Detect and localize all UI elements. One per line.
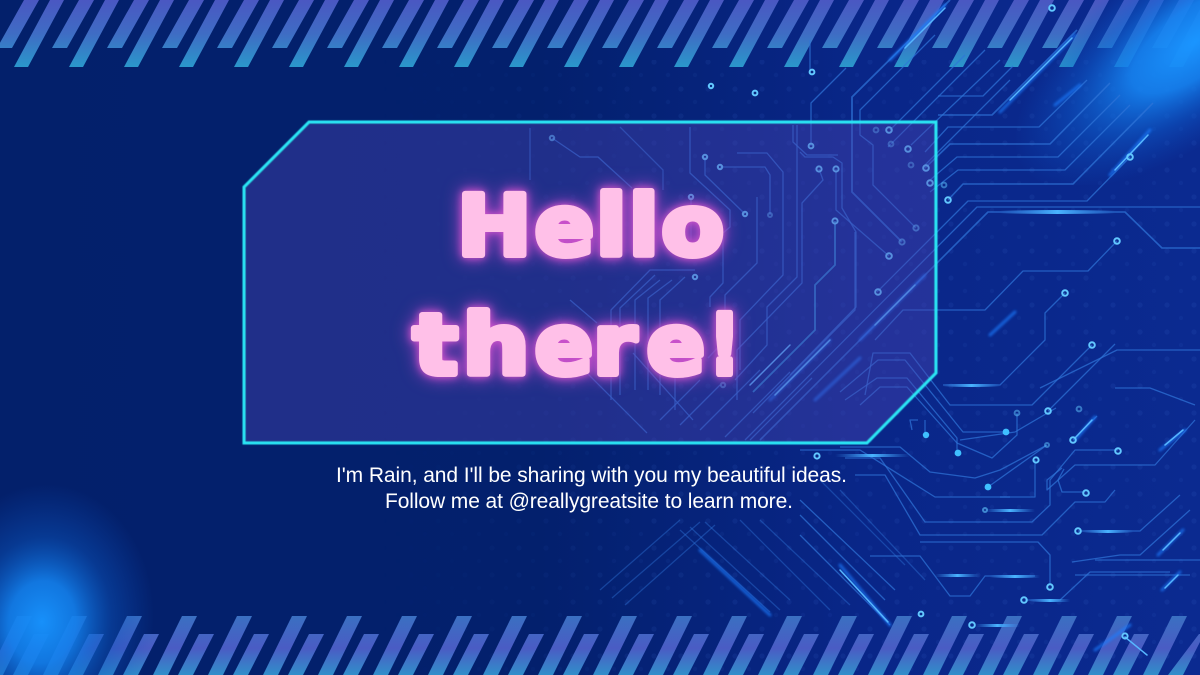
traces: lower centre diagonals — [600, 480, 925, 612]
bottom stripe band — [0, 616, 1200, 675]
subtitle line 2: Follow me at @reallygreatsite to learn more. — [385, 490, 793, 513]
title line 2: t — [413, 296, 458, 394]
traces: lower right bundle — [800, 344, 1200, 625]
title: Hello there! — [413, 177, 740, 394]
bright light streaks — [700, 5, 1185, 655]
title line 1: o — [661, 177, 724, 275]
filled circuit nodes — [923, 429, 1009, 490]
subtitle line 1: I'm Rain, and I'll be sharing with you my beautiful ideas. — [336, 464, 847, 487]
panel: neon frame — [244, 122, 936, 443]
traces: upper right bundle — [745, 0, 1200, 440]
subtitle text — [336, 464, 847, 513]
title line 1: e — [535, 177, 594, 275]
title line 2: r — [593, 296, 637, 394]
glow: top right — [1000, 0, 1200, 185]
title line 1: l — [596, 177, 627, 275]
title line 2: h — [462, 296, 530, 394]
glow: bottom left — [0, 485, 155, 675]
circuit nodes — [550, 5, 1133, 639]
horizontal glints — [835, 210, 1133, 627]
dot texture — [624, 60, 1116, 658]
title line 2: e — [647, 296, 705, 394]
circuit traces — [530, 0, 1200, 625]
title line 2: e — [535, 296, 593, 394]
traces: inside panel — [530, 125, 889, 440]
title line 1: H — [457, 177, 532, 275]
title line 1: l — [629, 177, 659, 275]
top stripe band — [0, 0, 1200, 67]
title line 2: ! — [709, 296, 740, 394]
